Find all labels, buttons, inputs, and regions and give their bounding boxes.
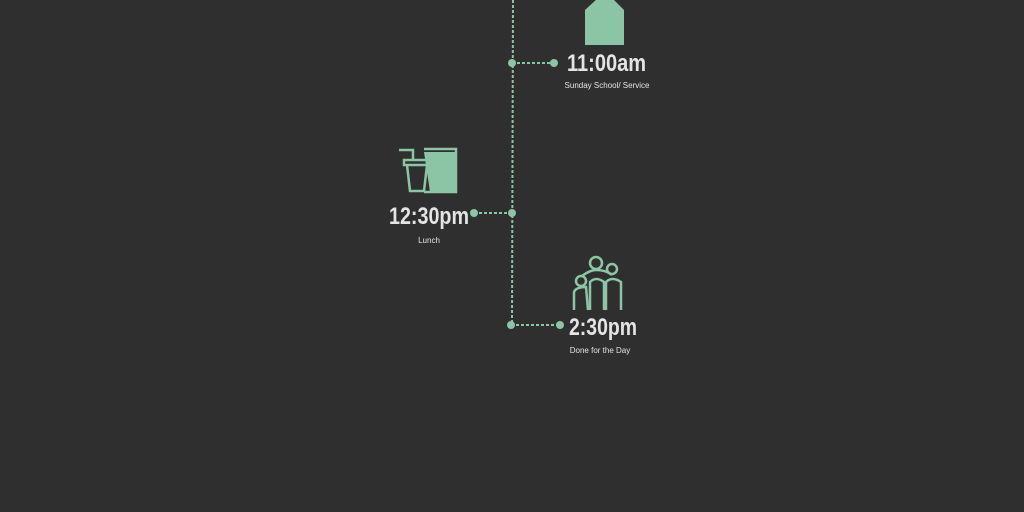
icon: lunch bbox=[399, 149, 456, 192]
label Lunch: Lunch bbox=[418, 236, 440, 245]
label Done for the Day: Done for the Day bbox=[570, 346, 630, 355]
time 2:30pm: 2:30pm bbox=[569, 314, 637, 341]
event: 11:00am bbox=[508, 0, 650, 90]
time 12:30pm: 12:30pm bbox=[389, 203, 469, 230]
icon: family bbox=[574, 257, 621, 310]
connector 11:00am bbox=[508, 59, 558, 67]
connector 12:30pm bbox=[470, 209, 516, 217]
connector 2:30pm bbox=[507, 321, 564, 329]
event: 2:30pm bbox=[507, 257, 637, 355]
timeline line bbox=[512, 0, 513, 325]
event: 12:30pm bbox=[389, 149, 516, 245]
label Sunday School: Sunday School/ Service bbox=[565, 81, 650, 90]
time 11:00am: 11:00am bbox=[567, 50, 646, 77]
icon: church bbox=[585, 0, 624, 45]
